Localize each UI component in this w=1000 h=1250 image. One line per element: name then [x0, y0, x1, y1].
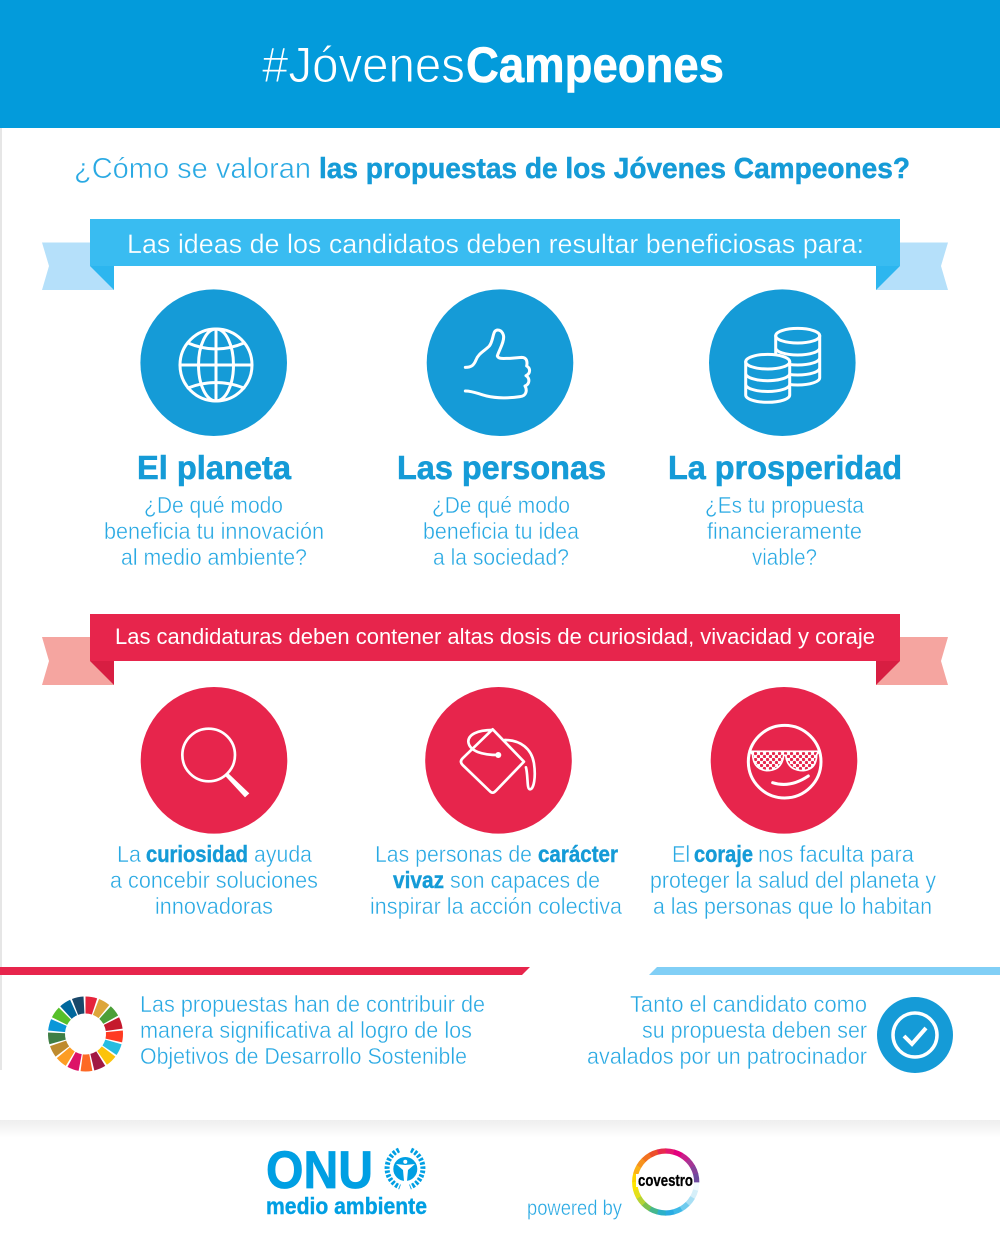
block: la prosperidad: viable? — [752, 544, 817, 570]
logo: ONU medio ambiente: medio ambiente — [266, 1193, 427, 1219]
icon: sustainable development goals wheel — [45, 993, 126, 1075]
block: la prosperidad: financieramente — [707, 518, 862, 544]
block: la prosperidad — [668, 449, 902, 570]
subtitle heading: las propuestas de los Jóvenes Campeones? — [319, 153, 910, 185]
text: coraje: El — [672, 841, 690, 867]
block: las personas: ¿De qué modo — [432, 492, 570, 518]
text: curiosidad: curiosidad — [146, 841, 248, 867]
text: curiosidad: innovadoras — [155, 893, 273, 919]
text: coraje: coraje — [694, 841, 753, 867]
block: el planeta: beneficia tu innovación — [104, 518, 324, 544]
icon: globe — [140, 289, 287, 436]
text: carácter vivaz — [370, 841, 622, 919]
block: las personas: Las personas — [397, 449, 606, 486]
blue ribbon — [42, 219, 948, 290]
text: sustainable development goals requirement: Objetivos de Desarrollo Sostenible — [140, 1043, 467, 1069]
block: las personas — [397, 449, 606, 570]
icon: thumbs up — [427, 289, 573, 436]
text: sustainable development goals requirement — [140, 991, 485, 1069]
icon: magnifying glass — [141, 687, 287, 834]
title: Campeones — [466, 37, 724, 93]
block: la prosperidad: ¿Es tu propuesta — [705, 492, 864, 518]
block: el planeta: ¿De qué modo — [144, 492, 283, 518]
red ribbon: Las candidaturas deben contener altas dosis de curiosidad, vivacidad y coraje — [115, 624, 875, 649]
red ribbon — [42, 614, 948, 685]
text: coraje: proteger la salud del planeta y — [650, 867, 936, 893]
block: las personas: beneficia tu idea — [423, 518, 579, 544]
block: el planeta — [104, 449, 324, 570]
text: sustainable development goals requirement: manera significativa al logro de los — [140, 1017, 472, 1043]
logo: ONU medio ambiente — [266, 1141, 427, 1219]
header banner — [0, 0, 1000, 128]
blue ribbon: Las ideas de los candidatos deben resultar beneficiosas para: — [127, 229, 864, 259]
text: sponsor requirement: avalados por un patrocinador — [587, 1043, 867, 1069]
icon: face with sunglasses — [711, 687, 857, 834]
icon: laurel emblem — [387, 1150, 423, 1187]
icon: paint bucket — [425, 687, 572, 834]
text: sponsor requirement: su propuesta deben ser — [642, 1017, 867, 1043]
text: sponsor requirement — [587, 991, 867, 1069]
title: #Jóvenes — [262, 37, 465, 93]
logo: covestro: covestro — [638, 1171, 693, 1190]
block: el planeta: El planeta — [137, 449, 292, 486]
block: el planeta: al medio ambiente? — [121, 544, 307, 570]
block: las personas: a la sociedad? — [433, 544, 569, 570]
text: curiosidad: La — [117, 841, 141, 867]
text: carácter vivaz: inspirar la acción colectiva — [370, 893, 622, 919]
text: coraje — [650, 841, 936, 919]
text: sustainable development goals requirement: Las propuestas han de contribuir de — [140, 991, 485, 1017]
block: la prosperidad: La prosperidad — [668, 449, 902, 486]
icon: check mark — [877, 997, 953, 1073]
text: curiosidad: a concebir soluciones — [110, 867, 318, 893]
text: carácter vivaz: Las personas de — [375, 841, 532, 867]
text: coraje: a las personas que lo habitan — [653, 893, 932, 919]
text: curiosidad: ayuda — [254, 841, 312, 867]
text: carácter vivaz: vivaz — [393, 867, 444, 893]
logo: covestro — [622, 1138, 710, 1226]
logo: ONU medio ambiente: ONU — [266, 1141, 373, 1200]
text: coraje: nos faculta para — [758, 841, 914, 867]
text: curiosidad — [110, 841, 318, 919]
text: sponsor requirement: Tanto el candidato como — [630, 991, 867, 1017]
icon: coins — [709, 289, 856, 436]
text: carácter vivaz: son capaces de — [450, 867, 600, 893]
subtitle heading — [74, 153, 910, 185]
subtitle heading: ¿Cómo se valoran — [74, 153, 311, 185]
title — [262, 37, 724, 93]
text: carácter vivaz: carácter — [538, 841, 618, 867]
text: powered by: powered by — [527, 1197, 622, 1220]
